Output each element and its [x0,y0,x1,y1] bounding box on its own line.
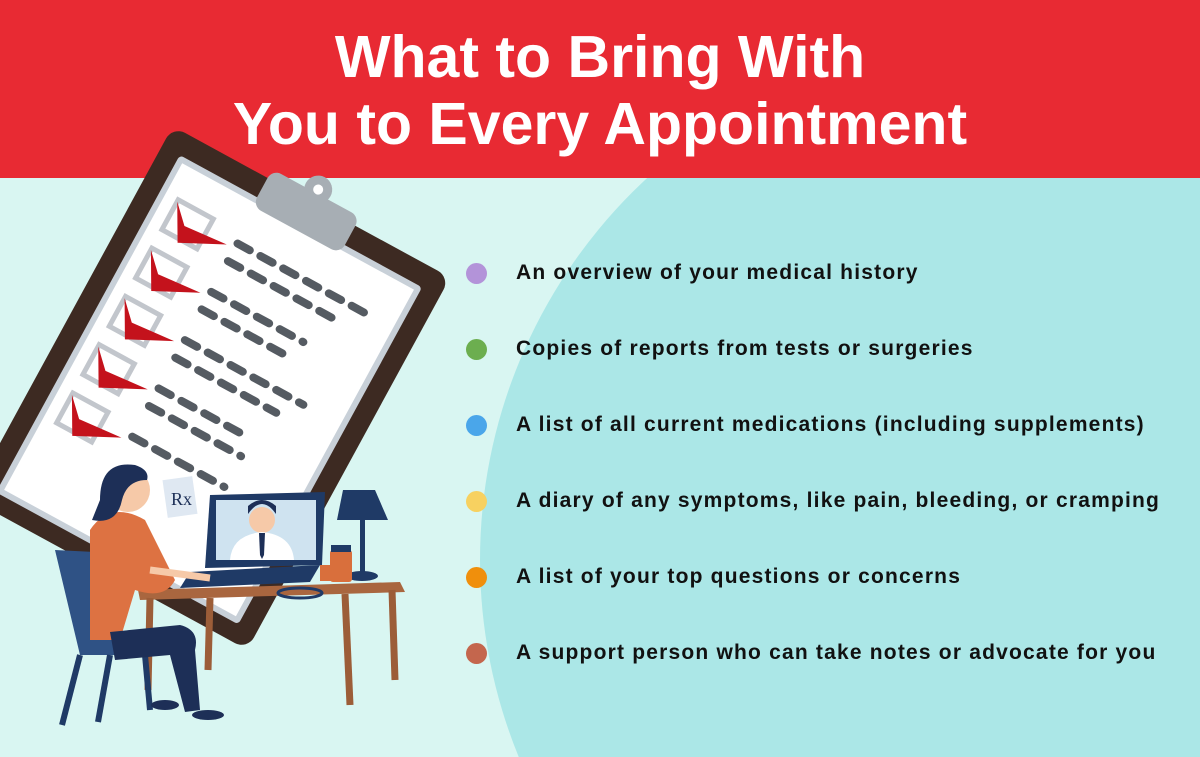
title: You to Every Appointment [233,91,967,157]
item: support person: A support person who can take notes or advocate for you [516,641,1156,664]
stethoscope [278,588,322,598]
checklist [466,261,1160,664]
lamp [337,490,388,520]
title: What to Bring With [335,24,865,90]
desk [138,582,405,600]
item: symptoms diary: A diary of any symptoms, like pain, bleeding, or cramping [516,489,1160,512]
item: medical history: An overview of your medical history [516,261,919,284]
header banner [0,0,1200,178]
item: reports: Copies of reports from tests or surgeries [516,337,974,360]
item: medications: A list of all current medications (including supplements) [516,413,1145,436]
title [233,24,967,157]
chair [55,550,150,655]
pill bottles [330,550,352,582]
illustration: clipboard with telehealth scene: Rx [171,489,192,509]
laptop [205,492,325,568]
doctor [249,507,275,533]
woman [90,512,175,640]
item: questions: A list of your top questions or concerns [516,565,961,588]
